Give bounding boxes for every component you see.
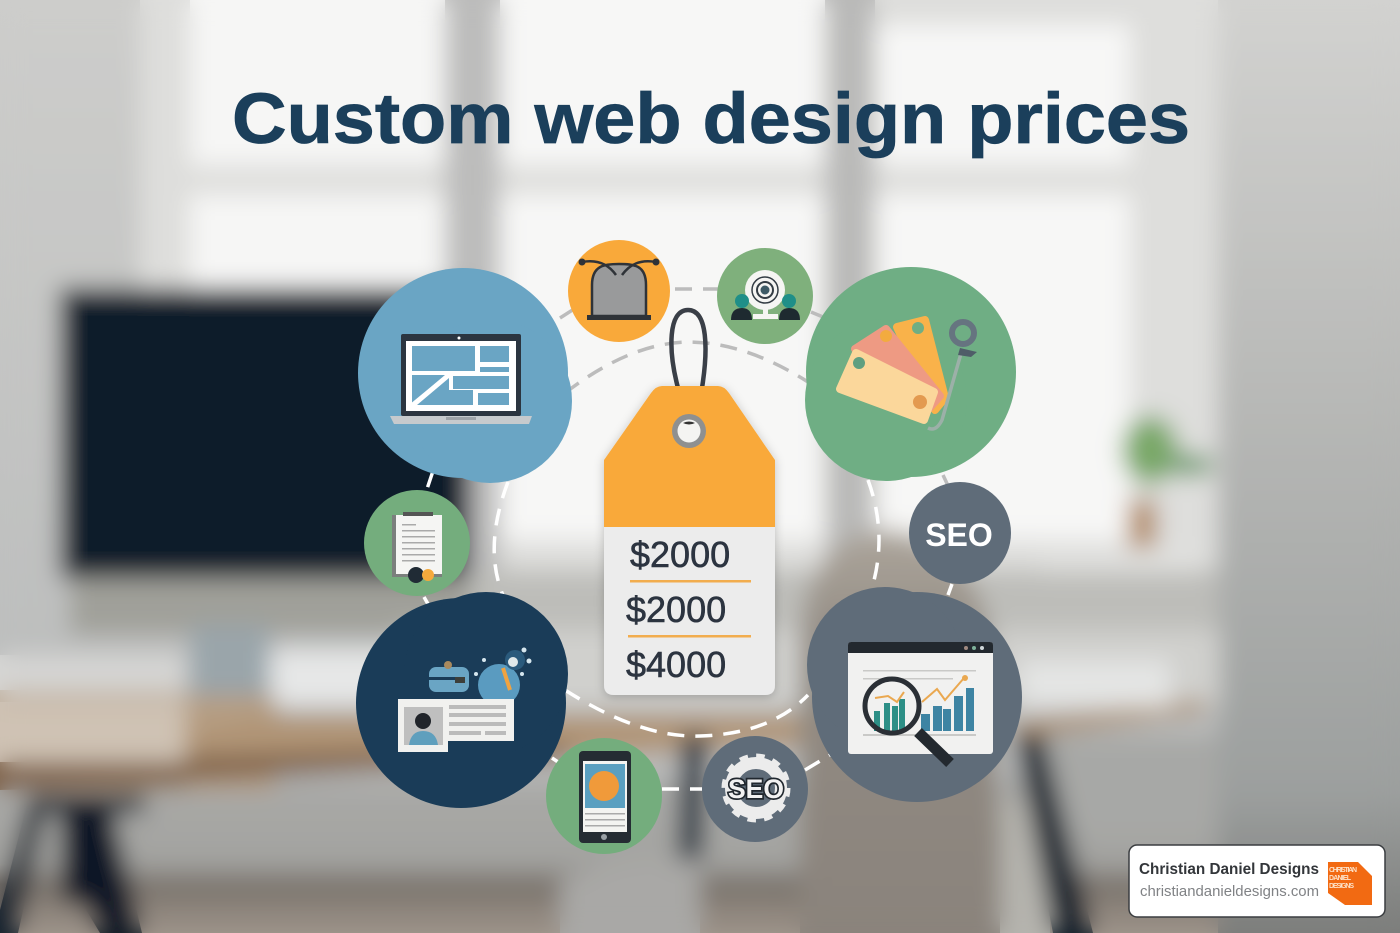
brand name: Christian Daniel Designs [1139, 861, 1319, 878]
icon: swatch fan with hook [840, 320, 977, 429]
divider 2 [628, 635, 751, 638]
icon: briefcase [429, 661, 469, 692]
tag orange top [604, 386, 775, 527]
title: Custom web design prices [232, 80, 1190, 159]
dashed connector rings [424, 289, 952, 789]
tag body [604, 386, 775, 695]
brand logo [1328, 862, 1372, 905]
icon: sketch bubble [568, 240, 670, 342]
price tag [604, 310, 775, 695]
brand logo: DANIEL [1329, 875, 1352, 882]
price 3: $4000 [626, 644, 726, 685]
icon: SEO gear bubble [702, 736, 808, 842]
price 2: $2000 [626, 589, 726, 630]
divider 1 [630, 580, 751, 582]
icon: mobile phone bubble [546, 738, 662, 854]
panel: color swatch bubble [805, 267, 1016, 481]
icon: SEO badge: SEO [925, 517, 993, 553]
icon: SEO gear bubble: SEO [728, 774, 784, 804]
brand logo: CHRISTIAN [1329, 867, 1357, 874]
icon: laptop wireframe [390, 334, 532, 424]
icon: SEO badge [909, 482, 1011, 584]
tag string [671, 310, 705, 388]
panel: wireframe laptop bubble [358, 268, 572, 483]
panel: analytics bubble [807, 587, 1022, 802]
brand url: christiandanieldesigns.com [1140, 883, 1319, 900]
icon: browser analytics window [848, 642, 993, 763]
icon: gear globe [474, 648, 532, 706]
icon: target audience bubble [717, 248, 813, 344]
price 1: $2000 [630, 534, 730, 575]
icon: profile card [398, 699, 514, 752]
panel: profile bubble [356, 592, 568, 808]
watermark badge [1129, 845, 1385, 917]
tag eyelet [672, 414, 706, 448]
icon: notebook bubble [364, 490, 470, 596]
brand logo: DESIGNS [1329, 883, 1354, 890]
